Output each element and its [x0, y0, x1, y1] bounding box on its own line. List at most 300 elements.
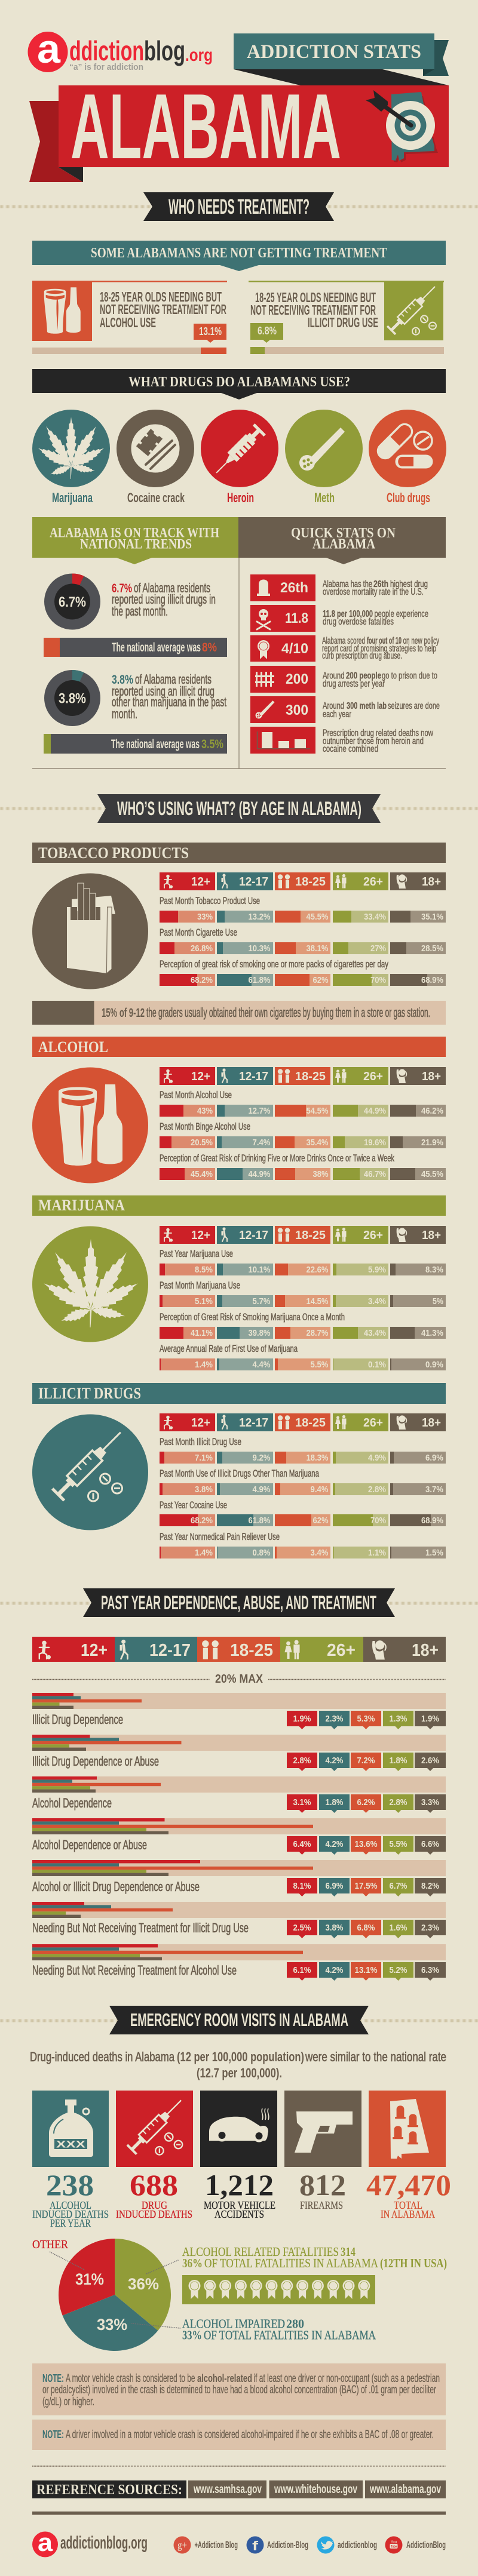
stat: 4/10: four out of 10 [367, 636, 402, 646]
stat: alcohol induced deaths: PER YEAR [50, 2217, 91, 2229]
row: past year marijuana use: 8.5% [195, 1265, 213, 1275]
stat: prescription drug deaths: cocaine combined [323, 744, 378, 754]
age legend: 12+ [191, 1070, 210, 1083]
row: average annual first use: 0.9% [425, 1360, 443, 1370]
row: past month marijuana use: 5.1% [195, 1296, 213, 1307]
bar chart: alcohol or illicit drug dependence or abuse: 17.5% [355, 1881, 378, 1891]
note: alcohol-impaired definition [32, 2420, 446, 2450]
stat: 11.8: 11.8 [285, 610, 308, 626]
text: 3.8% other than marijuana: of Alabama residents [135, 672, 212, 687]
row: past month cigarette use: 28.5% [421, 943, 443, 954]
bar chart: alcohol or illicit drug dependence or abuse [32, 1860, 446, 1896]
stat: motor vehicle accidents: ACCIDENTS [215, 2208, 264, 2220]
row: illicit drugs other than marijuana: 2.8% [368, 1484, 386, 1495]
stat: firearms [284, 2091, 361, 2211]
age legend [160, 1067, 446, 1085]
callout: 15% of graders: 15% of 9-12 [102, 1006, 145, 1020]
icon: car with smoke [209, 2108, 269, 2142]
bar chart: alcohol or illicit drug dependence or abuse: 6.9% [325, 1881, 343, 1891]
row: past month marijuana use: 3.4% [368, 1296, 386, 1307]
bar chart: alcohol dependence: 3.1% [293, 1797, 311, 1807]
stat: alcohol induced deaths: ALCOHOL [50, 2199, 91, 2211]
stat: 4/10: on new policy [403, 636, 439, 646]
bar: national average 8%: The national average was [112, 641, 201, 654]
heading: what drugs do Alabamans use [32, 369, 446, 399]
row: past month binge alcohol use: 20.5% [191, 1138, 213, 1148]
stat: drug induced deaths: INDUCED DEATHS [116, 2208, 192, 2220]
icon: tombstone [257, 579, 270, 596]
row: past month alcohol use [160, 1089, 446, 1117]
panel: tobacco products [32, 843, 446, 1025]
icon: Alabama map with graves [390, 2099, 429, 2159]
age legend: 26+ [363, 1229, 383, 1242]
heading: alcohol: ALCOHOL [38, 1038, 108, 1056]
panel: heroin: Heroin [227, 490, 254, 505]
stat: 4/10: curb prescription drug abuse. [322, 651, 402, 661]
logo: addictionblog.org: a [37, 26, 61, 72]
text: 3.8% other than marijuana: reported using an illicit drug [112, 684, 215, 699]
age legend: 18+ [422, 1070, 441, 1083]
text: alcohol impaired: OF TOTAL FATALITIES IN ALABAMA [204, 2328, 376, 2342]
panel: marijuana by age [32, 1195, 446, 1370]
section ribbon: past year dependence [0, 1588, 478, 1617]
stat: 4/10: Alabama scored [322, 636, 365, 646]
pie chart: fatalities [32, 2238, 180, 2351]
bar chart: alcohol dependence or abuse [32, 1818, 446, 1855]
stat: motor vehicle accidents [200, 2091, 277, 2220]
heading: what drugs do Alabamans use: WHAT DRUGS DO ALABAMANS USE? [128, 374, 350, 390]
bar chart: alcohol dependence [32, 1776, 446, 1813]
row: past month marijuana use: 14.5% [306, 1296, 329, 1307]
social: youtube [385, 2537, 446, 2553]
panel: heroin [201, 410, 278, 505]
text: alcohol related fatalities: OF TOTAL FATALITIES IN ALABAMA [204, 2256, 379, 2270]
age legend: 12+ [191, 875, 210, 889]
chart: 3.8% donut: 3.8% [59, 690, 86, 707]
stat: 200: drug arrests per year [323, 679, 385, 689]
pie chart: fatalities: 31% [75, 2270, 104, 2288]
row: past month alcohol use: 44.9% [364, 1106, 386, 1116]
bar chart: alcohol dependence or abuse: 5.5% [390, 1839, 407, 1849]
row: past month illicit drug use: Past Month Illicit Drug Use [160, 1436, 241, 1447]
row: past year cocaine use: 70% [370, 1516, 386, 1526]
stat: motor vehicle accidents: 1,212 [205, 2168, 274, 2202]
panel: illicit drug treatment gap [249, 281, 444, 354]
row: past year marijuana use [160, 1248, 446, 1275]
row: past month illicit drug use: 18.3% [306, 1453, 329, 1463]
bar chart: needing treatment for alcohol use: 4.2% [325, 1965, 343, 1975]
icon: handgun [295, 2111, 353, 2153]
row: illicit drugs other than marijuana: 3.7% [425, 1484, 443, 1495]
bar chart: needing treatment for illicit drug use: 1.6% [390, 1923, 407, 1933]
text: 3.8% other than marijuana [112, 672, 226, 721]
icon: syringe and pills [127, 2096, 186, 2155]
row: past month tobacco product use: Past Month Tobacco Product Use [160, 895, 260, 906]
row: past month tobacco product use: 13.2% [249, 912, 270, 922]
stat: total in Alabama: IN ALABAMA [381, 2208, 435, 2220]
icon: Alabama state target with arrow [366, 90, 438, 162]
row: average annual first use: 4.4% [252, 1360, 270, 1370]
age legend: large: 18-25 [230, 1641, 273, 1660]
row: illicit drugs other than marijuana: 3.8% [195, 1484, 213, 1495]
age legend: 12-17 [239, 875, 268, 889]
heading: not getting treatment: SOME ALABAMANS ARE NOT GETTING TREATMENT [91, 245, 387, 261]
row: past month cigarette use: 27% [370, 943, 386, 954]
bar chart: illicit drug dependence or abuse: 1.8% [390, 1756, 407, 1766]
row: past month illicit drug use: 9.2% [252, 1453, 270, 1463]
age legend: 18-25 [295, 875, 326, 889]
bar chart: alcohol or illicit drug dependence or abuse: 8.1% [293, 1881, 311, 1891]
stat: firearms: FIREARMS [300, 2199, 343, 2211]
bar chart: illicit drug dependence: 5.3% [357, 1714, 375, 1724]
icon: razor and lines [136, 429, 175, 469]
stat: 26th: overdose mortality rate in the U.S. [323, 587, 424, 597]
age legend: large: 12+ [81, 1641, 108, 1660]
bar: national average 3.5% [44, 734, 227, 754]
row: past month binge alcohol use: 7.4% [252, 1138, 270, 1148]
stat: 11.8: 11.8 per 100,000 [323, 609, 373, 619]
row: perception of risk of marijuana: 41.3% [421, 1328, 443, 1338]
scale label: 20% max: 20% MAX [215, 1673, 263, 1686]
reference sources: www.alabama.gov [369, 2483, 442, 2496]
row: perception of risk of drinking: 45.5% [421, 1169, 443, 1179]
text: 3.8% other than marijuana: month. [112, 706, 137, 721]
stat: 26th: Alabama has the [323, 579, 372, 589]
bar chart: illicit drug dependence: 1.9% [293, 1714, 311, 1724]
row: past month alcohol use: 54.5% [306, 1106, 329, 1116]
bar chart: needing treatment for alcohol use: 6.1% [293, 1965, 311, 1975]
text: alcohol related fatalities: ALCOHOL RELATED FATALITIES [182, 2245, 339, 2259]
icon: beer glass and bottle [44, 287, 81, 334]
row: past month marijuana use: 5.7% [252, 1296, 270, 1307]
age legend: 18+ [422, 875, 441, 889]
bar chart: alcohol or illicit drug dependence or abuse: 8.2% [421, 1881, 439, 1891]
social: twitter: addictionblog [338, 2540, 377, 2550]
section ribbon: emergency room visits [0, 2006, 478, 2034]
text: illicit gap description: 18-25 YEAR OLDS NEEDING BUT [255, 290, 376, 305]
age legend: 18+ [422, 1416, 441, 1430]
bar chart: illicit drug dependence or abuse: 2.8% [293, 1756, 311, 1766]
bar chart: illicit drug dependence or abuse: 2.6% [421, 1756, 439, 1766]
icon: marijuana leaf [36, 417, 106, 479]
section ribbon: who's using what [0, 794, 478, 823]
age legend: 18+ [422, 1229, 441, 1242]
row: past year cocaine use: 62% [313, 1516, 329, 1526]
note: alcohol-related definition: (g/dL) or higher. [42, 2396, 94, 2408]
text: 6.7% illicit drugs: the past month. [112, 604, 168, 619]
note: alcohol-related definition: alcohol-related [197, 2372, 252, 2384]
pie chart: fatalities: 36% [128, 2275, 159, 2293]
stat: 4/10 [250, 635, 439, 662]
stat: 200: 200 [286, 671, 308, 687]
text: drug-induced deaths summary: (12.7 per 100,000). [197, 2065, 282, 2080]
social: facebook [246, 2537, 308, 2553]
text: 6.7% illicit drugs [112, 580, 216, 619]
age legend: large: 26+ [327, 1641, 356, 1660]
row: nonmedical pain reliever use: 1.1% [368, 1548, 386, 1558]
bar chart: alcohol dependence: Alcohol Dependence [32, 1796, 112, 1810]
bar: national average 8% [44, 638, 227, 657]
stat: 300: 300 [286, 702, 308, 718]
bar chart: illicit drug dependence: 1.9% [421, 1714, 439, 1724]
text: 6.7% illicit drugs: reported using illicit drugs in [112, 592, 216, 607]
reference sources: REFERENCE SOURCES: [36, 2482, 182, 2498]
icon: prison fence [255, 672, 274, 687]
stat: total in Alabama: TOTAL [394, 2199, 422, 2211]
row: past month cigarette use: 10.3% [249, 943, 270, 954]
social: youtube: Tube [391, 2545, 397, 2549]
text: alcohol gap description: 18-25 YEAR OLDS NEEDING BUT [100, 289, 222, 305]
logo: addictionblog.org: .org [185, 45, 213, 65]
heading: quick stats: ALABAMA [312, 536, 376, 552]
text: alcohol gap description [100, 289, 226, 330]
bar chart: needing treatment for alcohol use: Needing But Not Receiving Treatment for Alcohol Use [32, 1963, 237, 1978]
bar chart: alcohol dependence or abuse: 13.6% [355, 1839, 378, 1849]
row: past month illicit drug use: 7.1% [195, 1453, 213, 1463]
heading: quick stats: QUICK STATS ON [291, 525, 396, 541]
row: past month alcohol use: 12.7% [249, 1106, 270, 1116]
text: 3.8% other than marijuana: 3.8% [112, 673, 133, 687]
stat: prescription drug deaths: outnumber those from heroin and [323, 736, 424, 746]
age legend: 12-17 [239, 1229, 268, 1242]
age legend: 26+ [363, 875, 383, 889]
row: past month alcohol use: Past Month Alcohol Use [160, 1089, 232, 1101]
age legend [160, 1413, 446, 1431]
row: perception of risk of drinking [160, 1152, 446, 1180]
bar chart: needing treatment for alcohol use: 13.1% [355, 1965, 378, 1975]
row: nonmedical pain reliever use: 3.4% [311, 1548, 329, 1558]
stat: 11.8: people experience [374, 609, 428, 619]
bar chart: illicit drug dependence or abuse [32, 1735, 446, 1771]
row: average annual first use [160, 1343, 446, 1370]
social: google plus [173, 2537, 238, 2553]
text: alcohol related fatalities: (12TH IN USA) [380, 2256, 447, 2270]
bar: national average 8%: 8% [202, 641, 217, 654]
bar chart: needing treatment for illicit drug use [32, 1902, 446, 1938]
row: past month binge alcohol use: 21.9% [421, 1138, 443, 1148]
text: alcohol related fatalities: 314 [341, 2245, 356, 2259]
icon: syringe and pills [32, 1414, 148, 1530]
row: past year cocaine use: Past Year Cocaine Use [160, 1499, 227, 1511]
bar chart: illicit drug dependence: Illicit Drug Dependence [32, 1712, 123, 1727]
row: perception of risk of marijuana: Perception of Great Risk of Smoking Marijuana Once a Month [160, 1311, 345, 1323]
row: past month marijuana use [160, 1280, 446, 1307]
icon: small bar chart [257, 731, 310, 749]
row: perception of risk of smoking: 62% [313, 975, 329, 985]
chart: 6.7% donut: 6.7% [59, 594, 86, 610]
stat: 300: Around [323, 701, 344, 711]
row: past year marijuana use: 22.6% [306, 1265, 329, 1275]
stat: total in Alabama: 47,470 [366, 2168, 451, 2202]
text: drug-induced deaths summary: Drug-induced deaths in Alabama [30, 2049, 175, 2064]
row: past month binge alcohol use [160, 1121, 446, 1148]
social: twitter [317, 2537, 377, 2553]
text: alcohol impaired: 280 [286, 2317, 304, 2331]
pie chart: fatalities: 33% [97, 2316, 127, 2334]
heading: illicit drugs [32, 1383, 446, 1404]
bar chart: alcohol dependence: 2.8% [390, 1797, 407, 1807]
age legend: 26+ [363, 1416, 383, 1430]
text: alcohol impaired [182, 2317, 376, 2342]
row: perception of risk of marijuana: 43.4% [364, 1328, 386, 1338]
heading: Alabama on track: NATIONAL TRENDS [80, 536, 192, 552]
bar chart: illicit drug dependence [32, 1693, 446, 1729]
reference sources [32, 2480, 446, 2498]
bar chart: alcohol dependence: 1.8% [325, 1797, 343, 1807]
reference sources: www.whitehouse.gov [274, 2483, 358, 2496]
bar chart: alcohol dependence: 6.2% [357, 1797, 375, 1807]
row: past month illicit drug use: 6.9% [425, 1453, 443, 1463]
text: illicit gap description [250, 290, 378, 330]
text: illicit gap description: ILLICIT DRUG USE [308, 315, 378, 330]
bar chart: needing treatment for illicit drug use: 2.5% [293, 1923, 311, 1933]
footer logo: addictionblog.org [60, 2533, 148, 2553]
stat: 4/10: 4/10 [281, 641, 308, 657]
text: drug-induced deaths summary [30, 2049, 446, 2080]
age legend [160, 872, 446, 890]
stat: prescription drug deaths [250, 727, 433, 754]
section ribbon: who needs treatment [0, 192, 478, 221]
stat: 26th [250, 574, 428, 601]
panel: alcohol treatment gap [32, 281, 227, 354]
age legend: large: 18+ [412, 1641, 439, 1660]
social: facebook: Addiction-Blog [267, 2540, 308, 2550]
stat: 200 [250, 666, 437, 693]
heading: Alabama on track [32, 517, 238, 564]
row: past month illicit drug use: 4.9% [368, 1453, 386, 1463]
text: illicit gap description: NOT RECEIVING TREATMENT FOR [250, 302, 376, 318]
row: perception of risk of marijuana: 39.8% [249, 1328, 270, 1338]
stat: drug induced deaths: 688 [130, 2168, 178, 2202]
row: perception of risk of smoking [160, 958, 446, 986]
callout: 6.8% [250, 323, 283, 343]
bar chart: needing treatment for alcohol use: 5.2% [390, 1965, 407, 1975]
heading: illicit drugs: ILLICIT DRUGS [38, 1385, 141, 1402]
text: alcohol related fatalities [182, 2245, 447, 2270]
stat: alcohol induced deaths: 238 [46, 2168, 94, 2202]
footer logo: a [38, 2528, 53, 2556]
text: 6.7% illicit drugs: of Alabama residents [134, 580, 210, 595]
row: past month cigarette use: 26.8% [191, 943, 213, 954]
panel: cocaine crack [117, 410, 194, 505]
row: perception of risk of drinking: 38% [313, 1169, 329, 1179]
heading: marijuana: MARIJUANA [38, 1197, 125, 1214]
icon: moonshine jug [49, 2099, 93, 2157]
stat: alcohol induced deaths [32, 2091, 109, 2229]
bar chart: needing treatment for alcohol use: 6.3% [421, 1965, 439, 1975]
icon: syringe and pills [387, 282, 439, 335]
icon: rosette [258, 640, 269, 659]
row: perception of risk of smoking: 68.9% [421, 975, 443, 985]
bar: 13.1% [32, 348, 226, 354]
stat: alcohol induced deaths: INDUCED DEATHS [32, 2208, 109, 2220]
bar chart: needing treatment for alcohol use [32, 1944, 446, 1981]
text: 3.8% other than marijuana: other than marijuana in the past [112, 694, 226, 709]
logo: addictionblog.org: ddiction [69, 35, 144, 66]
icon: meth pipe [299, 428, 345, 471]
row: illicit drugs other than marijuana: 9.4% [311, 1484, 329, 1495]
heading: quick stats [238, 517, 446, 564]
callout: 6.8%: 6.8% [258, 325, 277, 337]
stat: prescription drug deaths: Prescription drug related deaths now [323, 728, 433, 738]
bar chart: alcohol or illicit drug dependence or abuse: 6.7% [390, 1881, 407, 1891]
section ribbon: who needs treatment: WHO NEEDS TREATMENT? [168, 195, 310, 219]
row: past month tobacco product use: 33% [197, 912, 213, 922]
row: perception of risk of marijuana: 28.7% [306, 1328, 329, 1338]
note: alcohol-impaired definition: NOTE: [42, 2429, 64, 2440]
icon: moonshine jug: XXX [56, 2139, 86, 2150]
panel: alcohol [32, 1037, 446, 1184]
row: past month tobacco product use [160, 895, 446, 923]
age legend [160, 1226, 446, 1244]
stat: 300: seizures are done [388, 701, 440, 711]
callout: 15% of graders [32, 1001, 446, 1025]
row: past month binge alcohol use: 19.6% [364, 1138, 386, 1148]
row: past year marijuana use: Past Year Marijuana Use [160, 1248, 233, 1259]
row: past month cigarette use [160, 927, 446, 954]
row: past month marijuana use: Past Month Marijuana Use [160, 1280, 240, 1291]
stat: 26th: 26th [373, 579, 388, 589]
heading: tobacco: TOBACCO PRODUCTS [38, 844, 189, 862]
icon: cigarette pack [32, 873, 148, 989]
bar: 6.8% [250, 347, 444, 354]
age legend: 18-25 [295, 1416, 326, 1430]
panel: marijuana [32, 410, 110, 505]
bar chart: illicit drug dependence or abuse: 4.2% [325, 1756, 343, 1766]
bar chart: illicit drug dependence: 2.3% [325, 1714, 343, 1724]
row: past year cocaine use [160, 1499, 446, 1526]
row: nonmedical pain reliever use: Past Year Nonmedical Pain Reliever Use [160, 1531, 280, 1542]
row: perception of risk of smoking: 70% [370, 975, 386, 985]
bar: national average 3.5%: The national average was [111, 737, 200, 751]
age legend: large [32, 1637, 446, 1662]
row: nonmedical pain reliever use [160, 1531, 446, 1558]
stat: 300 [250, 696, 440, 723]
row: past month tobacco product use: 33.4% [364, 912, 386, 922]
age legend: large: 12-17 [149, 1641, 191, 1660]
row: perception of risk of drinking: 46.7% [364, 1169, 386, 1179]
age legend: 12+ [191, 1416, 210, 1430]
panel: club drugs: Club drugs [387, 490, 430, 505]
stat: 26th: highest drug [390, 579, 428, 589]
stat: total in Alabama [366, 2091, 451, 2220]
social: youtube: You [391, 2540, 397, 2544]
bar chart: alcohol dependence or abuse: 6.6% [421, 1839, 439, 1849]
logo: addictionblog.org [27, 26, 213, 72]
callout: 13.1% [194, 324, 226, 343]
reference sources: www.samhsa.gov [193, 2483, 262, 2496]
bar chart: needing treatment for illicit drug use: 6.8% [357, 1923, 375, 1933]
social: google plus: g+ [177, 2539, 187, 2551]
bar chart: alcohol dependence: 3.3% [421, 1797, 439, 1807]
row: past year cocaine use: 68.9% [421, 1516, 443, 1526]
age legend: 18-25 [295, 1229, 326, 1242]
social: facebook: f [252, 2538, 259, 2553]
text: alcohol related fatalities: 36% [182, 2256, 203, 2270]
stat: drug induced deaths: DRUG [142, 2199, 167, 2211]
row: past year cocaine use: 68.2% [191, 1516, 213, 1526]
age legend: 12-17 [239, 1416, 268, 1430]
text: alcohol gap description: ALCOHOL USE [100, 315, 156, 330]
row: average annual first use: Average Annual Rate of First Use of Marijuana [160, 1343, 298, 1354]
row: past year marijuana use: 10.1% [249, 1265, 270, 1275]
row: perception of risk of smoking: 68.2% [191, 975, 213, 985]
bar chart: alcohol dependence or abuse: 4.2% [325, 1839, 343, 1849]
stat: 300: each year [323, 709, 351, 720]
text: alcohol gap description: NOT RECEIVING TREATMENT FOR [100, 302, 226, 317]
age legend: 26+ [363, 1070, 383, 1083]
bar chart: needing treatment for illicit drug use: Needing But Not Receiving Treatment for Illicit Drug Use [32, 1920, 249, 1935]
